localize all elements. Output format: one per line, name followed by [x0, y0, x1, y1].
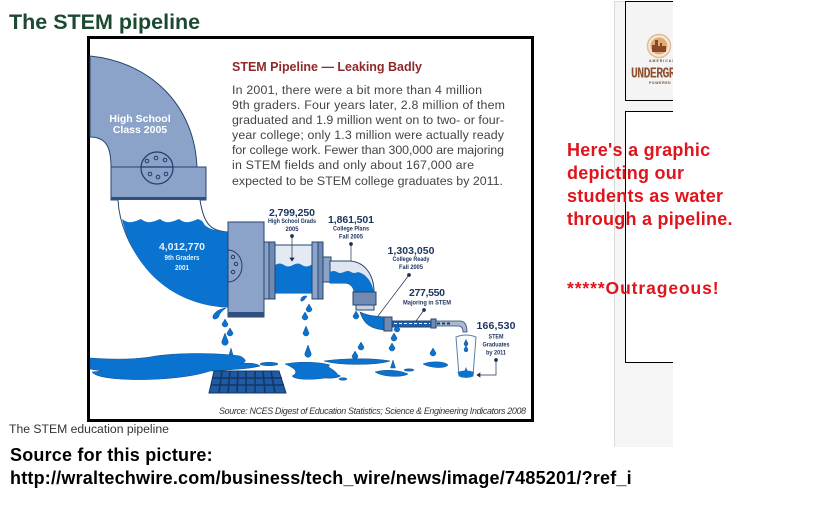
- label: STEM graduates: 166,530: [476, 320, 516, 332]
- red commentary: depicting our: [567, 163, 684, 183]
- infographic paragraph: year college; only 1.3 million were actually ready: [232, 128, 505, 142]
- label: STEM graduates: [476, 320, 516, 356]
- source credit: Source: NCES Digest of Education Statistics; Science & Engineering Indicators 2008: [219, 406, 526, 416]
- red commentary: Here's a graphic: [567, 140, 710, 160]
- infographic paragraph: In 2001, there were a bit more than 4 million: [232, 83, 482, 97]
- upper elbow pipe: [90, 56, 206, 200]
- label: college plans: 1,861,501: [328, 214, 374, 226]
- source note: Source for this picture:: [10, 445, 213, 465]
- label: high school grads: 2005: [286, 226, 299, 233]
- label: college plans: [328, 214, 374, 240]
- red outrage note: *****Outrageous!: [567, 278, 720, 298]
- label: college ready: College Ready: [392, 256, 430, 263]
- infographic paragraph: expected to be STEM college graduates by 2011.: [232, 174, 503, 188]
- red commentary: [567, 140, 733, 229]
- label: 9th graders: [159, 241, 205, 272]
- label: 9th graders: 2001: [175, 265, 189, 272]
- drain grate: [209, 371, 286, 393]
- label: majoring in STEM: 277,550: [409, 287, 445, 299]
- label: college plans: College Plans: [333, 226, 369, 232]
- infographic heading: STEM Pipeline — Leaking Badly: [232, 60, 422, 74]
- label: high school class: Class 2005: [113, 124, 167, 136]
- water drips: [213, 296, 436, 368]
- infographic paragraph: in STEM fields and only about 167,000 are: [232, 158, 474, 172]
- label: college ready: Fall 2005: [399, 264, 423, 271]
- leader lines: [290, 234, 498, 377]
- connecting pipes and flanges: [228, 222, 331, 317]
- label: STEM graduates: by 2011: [486, 350, 506, 356]
- red commentary: through a pipeline.: [567, 209, 733, 229]
- label: high school grads: [268, 207, 316, 233]
- label: college ready: 1,303,050: [388, 245, 435, 257]
- label: college ready: [388, 245, 435, 271]
- label: college plans: Fall 2005: [339, 234, 363, 240]
- label: high school class: High School: [109, 113, 171, 125]
- label: STEM graduates: Graduates: [482, 342, 510, 348]
- title: The STEM pipeline: [9, 10, 200, 34]
- source note: http://wraltechwire.com/business/tech_wire/news/image/7485201/?ref_i: [10, 468, 632, 488]
- infographic paragraph: [232, 83, 505, 188]
- label: high school class: [109, 113, 171, 136]
- label: majoring in STEM: [403, 287, 451, 306]
- source note: [10, 445, 632, 488]
- drinking glass: [456, 335, 476, 378]
- label: 9th graders: 4,012,770: [159, 241, 205, 253]
- red commentary: students as water: [567, 186, 723, 206]
- label: high school grads: 2,799,250: [269, 207, 315, 219]
- sidebar background: [614, 1, 673, 447]
- infographic paragraph: for college work. Fewer than 300,000 are majoring: [232, 143, 504, 157]
- infographic paragraph: graduated and 1.9 million went on to two- or four-: [232, 113, 504, 127]
- advertisement box: American Underground logo: [625, 1, 673, 101]
- infographic frame: [88, 38, 532, 420]
- label: 9th graders: 9th Graders: [164, 255, 200, 262]
- label: high school grads: High School Grads: [268, 218, 316, 225]
- second elbow pipe: [330, 261, 376, 310]
- label: STEM graduates: STEM: [488, 334, 504, 340]
- logo emblem: [646, 34, 672, 58]
- pipeline data labels: [268, 207, 516, 356]
- narrow pipeline to glass: [360, 312, 467, 332]
- label: majoring in STEM: Majoring in STEM: [403, 300, 451, 306]
- water puddles: [90, 354, 448, 380]
- image caption: The STEM education pipeline: [9, 422, 169, 436]
- pipeline infographic: [87, 36, 534, 422]
- main water bowl: [118, 200, 228, 307]
- second sidebar box: [625, 111, 673, 363]
- infographic paragraph: 9th graders. Four years later, 2.8 million of them: [232, 98, 505, 112]
